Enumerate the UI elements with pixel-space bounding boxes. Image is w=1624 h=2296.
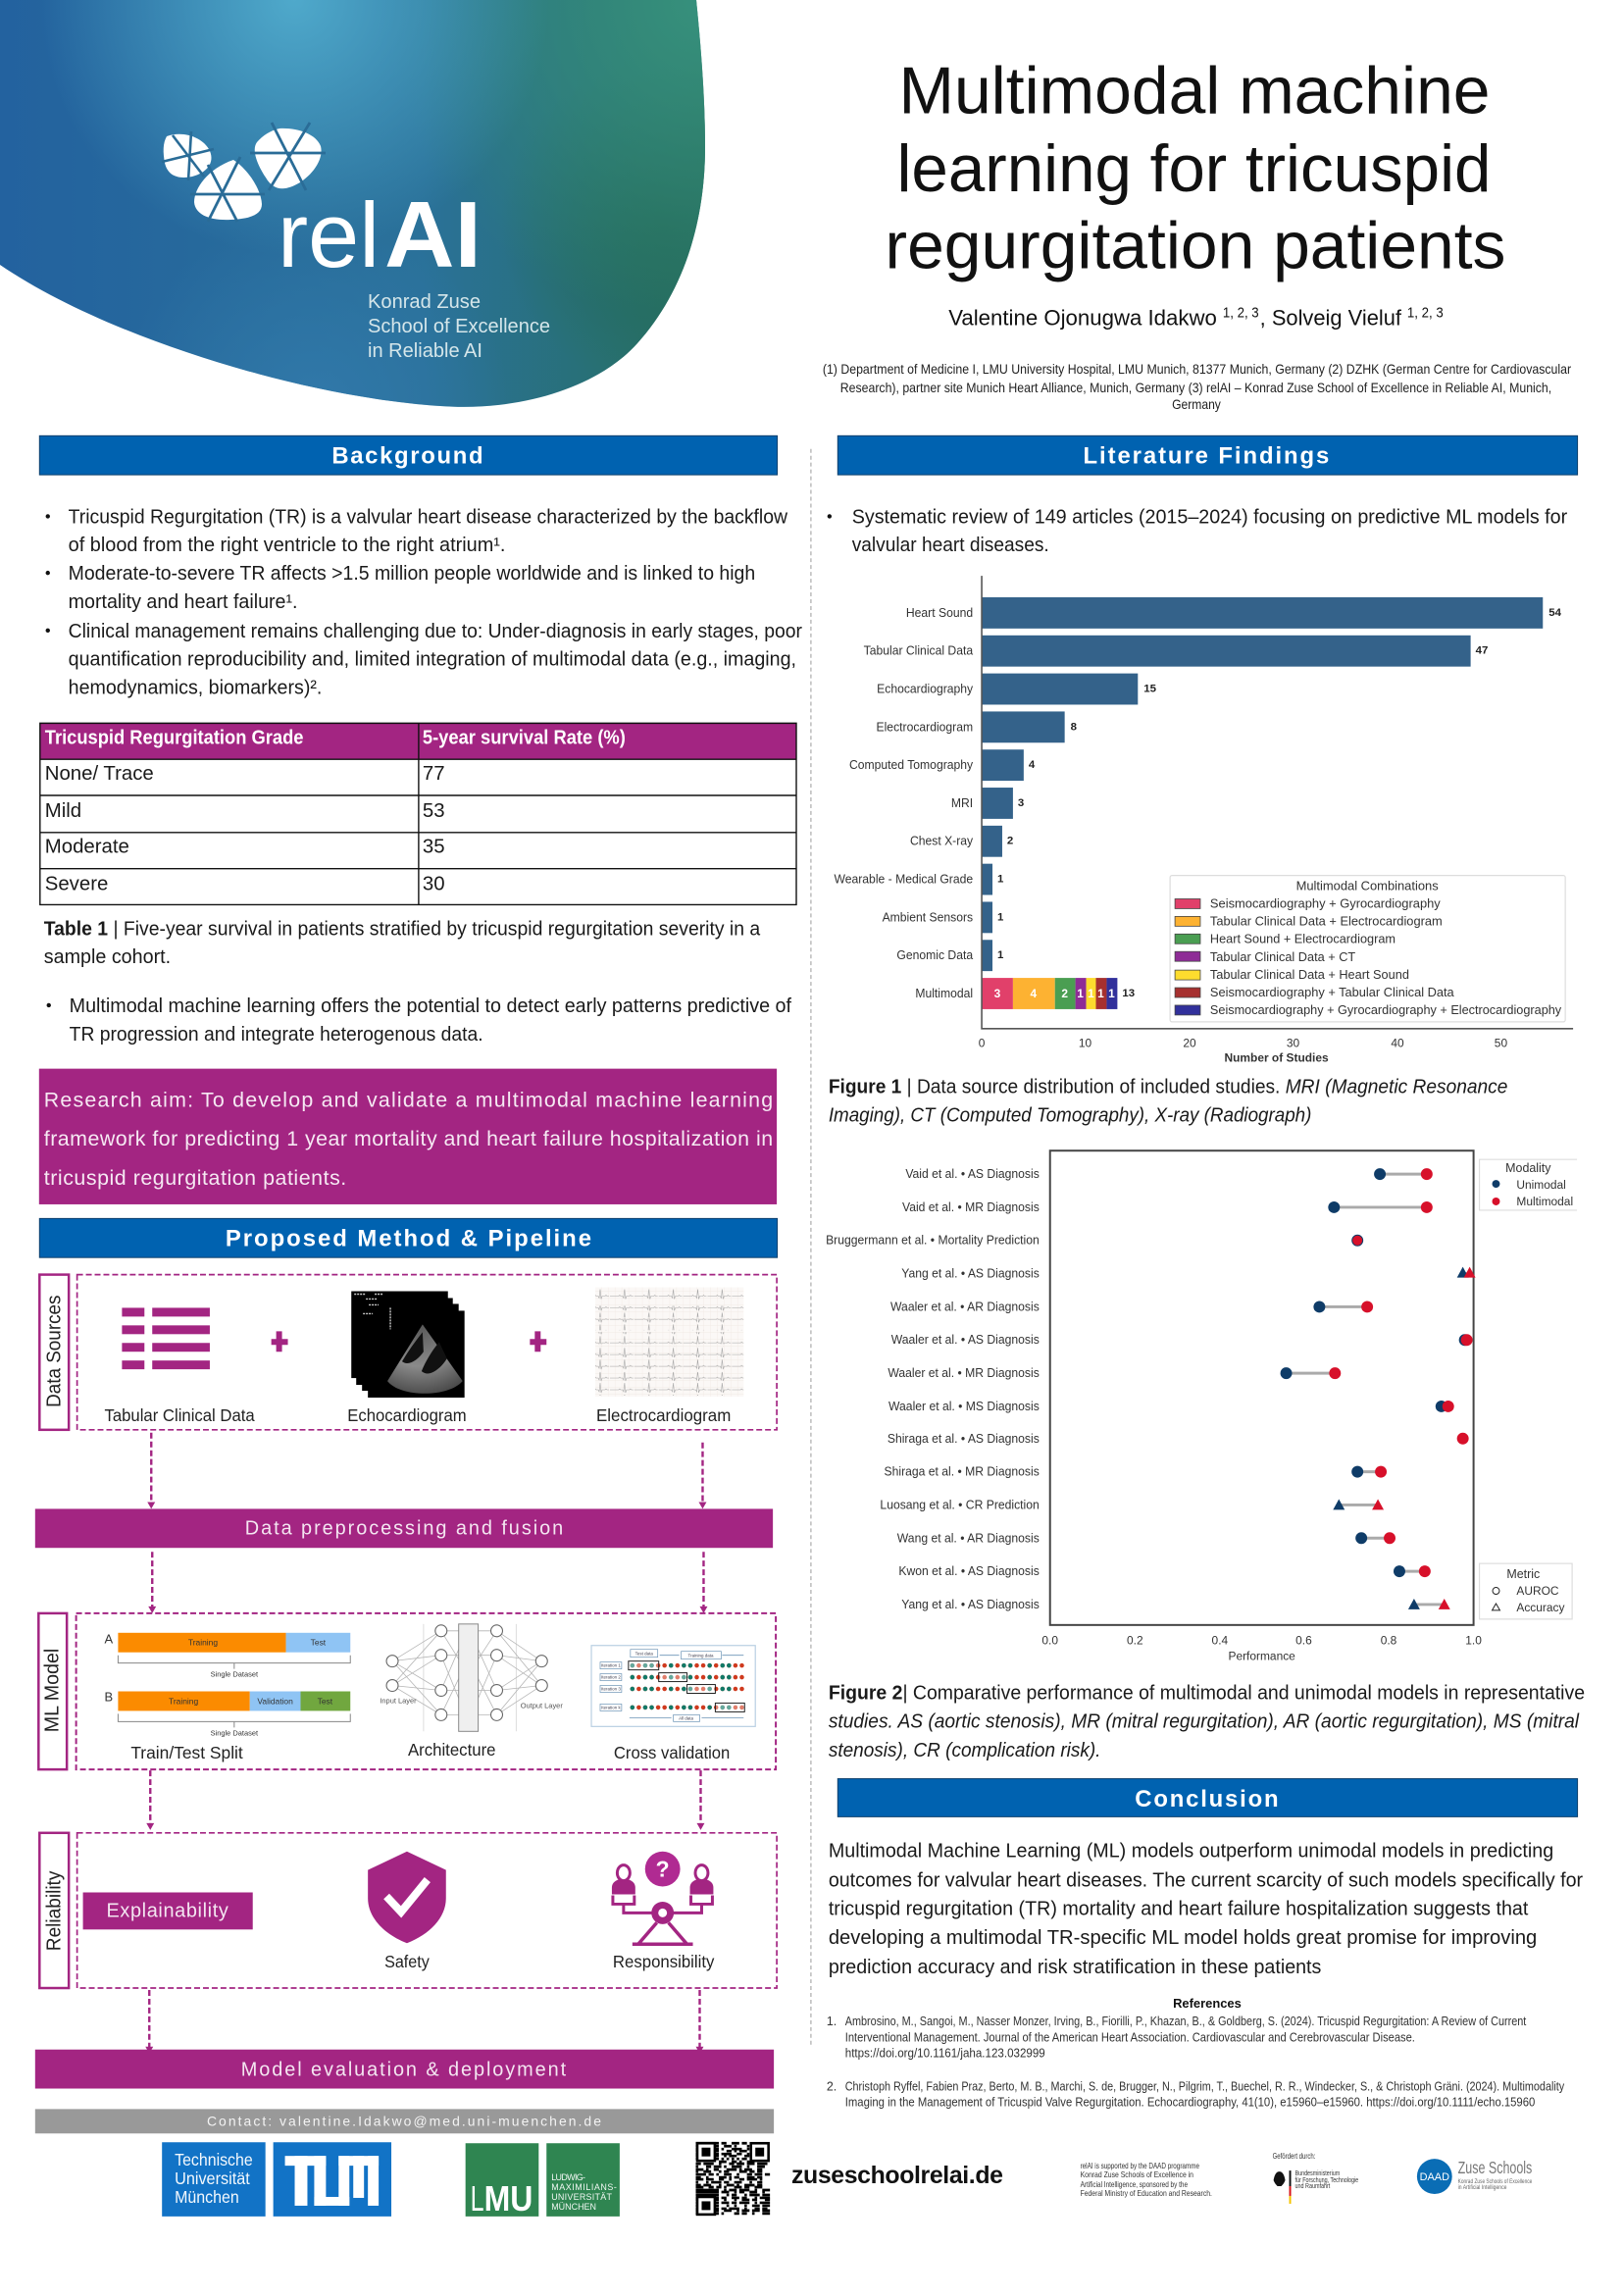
conclusion text: prediction accuracy and risk stratification in these patients [829, 1957, 1321, 1978]
conclusion text: outcomes for valvular heart diseases. The current scarcity of such models specifically for [829, 1870, 1583, 1892]
chart: train/test split: B [104, 1689, 113, 1704]
legend: metric: AUROC [1516, 1584, 1559, 1598]
category labels: Ambient Sensors [883, 910, 973, 924]
chart: train/test split: Test [311, 1638, 327, 1648]
chart: train/test split [104, 1632, 350, 1737]
figure 2 caption: studies. AS (aortic stenosis), MR (mitral regurgitation), AR (aortic regurgitation), MS (mitral [829, 1710, 1580, 1732]
figure 1 caption [829, 1077, 1507, 1126]
value labels: 1 [997, 949, 1004, 961]
diagram: cross validation: Iteration 1 [601, 1663, 621, 1668]
bullet: systematic review [828, 506, 1567, 556]
icon: tabular data [122, 1307, 210, 1369]
logo: LMU: MU [484, 2179, 533, 2219]
x axis: 30 [1287, 1037, 1300, 1050]
table: survival by grade: 77 [423, 763, 445, 785]
source labels: Echocardiogram [347, 1405, 467, 1425]
study labels: Vaid et al. • AS Diagnosis [905, 1167, 1040, 1181]
diagram: cross validation: Iteration 2 [601, 1675, 621, 1680]
image: ECG trace [595, 1288, 743, 1397]
heading: Literature Findings: Literature Findings [1084, 443, 1329, 470]
callout: research aim [39, 1069, 777, 1204]
references: https://doi.org/10.1161/jaha.123.032999 [845, 2047, 1045, 2061]
arrow: sources to preprocessing left [147, 1433, 155, 1508]
multimodal stacked bar: 2 [1061, 987, 1068, 1000]
module labels: Architecture [408, 1740, 496, 1760]
table: survival by grade: Moderate [45, 837, 129, 858]
references: References [1173, 1996, 1242, 2011]
references [827, 1996, 1565, 2109]
chart: train/test split: Training [169, 1696, 198, 1706]
category labels: Multimodal [915, 987, 973, 1000]
x axis [979, 1037, 1507, 1065]
module labels [130, 1740, 730, 1762]
logo: LMU: MAXIMILIANS- [551, 2182, 617, 2192]
diagram: network architecture: Output Layer [521, 1701, 563, 1709]
panel: data sources [39, 1275, 777, 1430]
table: survival by grade: 53 [423, 800, 445, 822]
image: echocardiogram stack [351, 1292, 465, 1398]
icon: safety shield [368, 1852, 446, 1943]
table: survival by grade: 30 [423, 874, 445, 895]
table: survival by grade: 35 [423, 837, 445, 858]
logo: TUM [162, 2142, 391, 2217]
multimodal stacked bar: 4 [1030, 987, 1037, 1000]
performance axis: 0.4 [1212, 1634, 1229, 1648]
category labels: Echocardiography [877, 682, 974, 696]
source labels: Tabular Clinical Data [104, 1405, 255, 1425]
bullet: systematic review: Systematic review of 149 articles (2015–2024) focusing on predictive ML models for [852, 506, 1567, 528]
arrow: model to reliability left [146, 1770, 154, 1830]
icon: plus [272, 1331, 288, 1352]
callout: research aim: tricuspid regurgitation patients. [44, 1166, 346, 1190]
panel: ML model [38, 1613, 776, 1769]
study labels: Shiraga et al. • AS Diagnosis [888, 1431, 1040, 1446]
logo wordmark relAI [278, 182, 482, 287]
chart: train/test split: Training [188, 1638, 218, 1648]
table: survival by grade: 5-year survival Rate (%) [423, 727, 626, 748]
chart: train/test split: Test [318, 1696, 333, 1706]
diagram: cross validation: Iteration 3 [601, 1687, 621, 1692]
logo: DAAD Zuse Schools: DAAD [1420, 2171, 1449, 2183]
diagram: cross validation: All data [679, 1715, 694, 1720]
title: Multimodal machine [898, 54, 1491, 128]
affiliations: Germany [1172, 397, 1221, 412]
authors: 1, 2, 3 [1223, 304, 1259, 321]
x axis: 20 [1183, 1037, 1196, 1050]
diagram: cross validation: Training data [688, 1654, 714, 1658]
study labels: Vaid et al. • MR Diagnosis [902, 1200, 1040, 1214]
multimodal stacked bar: 1 [1108, 987, 1115, 1000]
multimodal stacked bar: 3 [994, 987, 1001, 1000]
references: Ambrosino, M., Sangoi, M., Nasser Monzer, Irving, B., Fiorilli, P., Khazan, B., & Goldberg, S. (2024). Tricuspid Regurgitation: A Review of Current [845, 2015, 1527, 2028]
sponsor note: Federal Ministry of Education and Research. [1081, 2189, 1212, 2198]
table: survival by grade: Mild [45, 800, 81, 822]
icon: relAI wheels logo [162, 123, 326, 222]
legend: multimodal combinations: Seismocardiography + Gyrocardiography [1210, 895, 1441, 910]
figure 2 caption: Figure 2| Comparative performance of multimodal and unimodal models in representative [829, 1682, 1585, 1704]
diagram: cross validation: Test data [635, 1652, 653, 1657]
panel: background text: quantification reproducibility and, limited integration of multimodal data (e.g., imaging, [69, 649, 796, 671]
category labels: Tabular Clinical Data [864, 643, 973, 658]
authors: 1, 2, 3 [1407, 304, 1444, 321]
category labels: Electrocardiogram [876, 720, 973, 734]
bullet: multimodal potential: Multimodal machine learning offers the potential to detect early patterns predictive of [70, 995, 791, 1017]
label: Safety: Safety [384, 1952, 430, 1971]
bar: data preprocessing and fusion: Data preprocessing and fusion [245, 1517, 563, 1539]
authors: Valentine Ojonugwa Idakwo [948, 305, 1217, 330]
bar: model evaluation and deployment: Model evaluation & deployment [241, 2060, 567, 2081]
performance axis: 0.2 [1127, 1634, 1143, 1648]
study labels: Waaler et al. • AR Diagnosis [890, 1300, 1040, 1314]
logo subtitle [368, 291, 550, 362]
arrow: reliability to evaluation left [145, 1990, 153, 2054]
logo: TUM: Technische [175, 2150, 253, 2169]
legend: modality [1480, 1159, 1577, 1210]
value labels: 15 [1143, 684, 1157, 695]
bars [982, 597, 1543, 971]
table: survival by grade: None/ Trace [45, 763, 154, 785]
callout: research aim: framework for predicting 1 year mortality and heart failure hospitalization in [44, 1127, 773, 1150]
legend: modality: Multimodal [1516, 1195, 1573, 1208]
panel: reliability [39, 1833, 777, 1988]
module labels: Cross validation [614, 1743, 730, 1762]
panel: background text: Tricuspid Regurgitation (TR) is a valvular heart disease characterized by the backflow [69, 506, 787, 528]
chart: train/test split: A [104, 1632, 113, 1647]
panel: background text: hemodynamics, biomarkers)². [69, 678, 322, 699]
multimodal markers [1329, 1168, 1476, 1609]
bar: contact: Contact: valentine.Idakwo@med.uni-muenchen.de [207, 2113, 601, 2128]
multimodal stacked bar [982, 978, 1117, 1009]
logo wordmark relAI: AI [384, 182, 482, 287]
heading: Literature Findings [837, 435, 1578, 475]
legend: multimodal combinations: Tabular Clinical Data + CT [1210, 949, 1355, 964]
diagram: network architecture [380, 1624, 563, 1731]
category labels: Computed Tomography [849, 758, 974, 772]
authors [948, 304, 1444, 330]
logo subtitle: Konrad Zuse [368, 291, 481, 313]
logo: TUM: Universität [175, 2168, 250, 2188]
source labels [104, 1405, 731, 1425]
table: survival by grade [40, 723, 796, 904]
legend: multimodal combinations: Heart Sound + Electrocardiogram [1210, 931, 1396, 945]
sponsor note: relAI is supported by the DAAD programme [1081, 2162, 1199, 2170]
value labels: 47 [1476, 645, 1488, 657]
chart: data source distribution [834, 576, 1573, 1065]
icon: plus [530, 1331, 546, 1352]
multimodal stacked bar: 1 [1097, 987, 1104, 1000]
panel: background text: of blood from the right ventricle to the right atrium¹. [69, 535, 505, 556]
table caption: Table 1 | Five-year survival in patients stratified by tricuspid regurgitation severity in a [44, 918, 761, 940]
legend: multimodal combinations: Tabular Clinical Data + Electrocardiogram [1210, 913, 1443, 928]
study labels: Waaler et al. • MR Diagnosis [888, 1366, 1040, 1380]
title: regurgitation patients [886, 210, 1505, 283]
logo: LMU: MÜNCHEN [551, 2202, 596, 2212]
affiliations: (1) Department of Medicine I, LMU University Hospital, LMU Munich, 81377 Munich, Germany (2) DZHK (German Centre for Cardiovascular [823, 362, 1572, 377]
x axis: 40 [1391, 1037, 1404, 1050]
diagram: cross validation [591, 1646, 755, 1726]
figure 2 caption: stenosis), CR (complication risk). [829, 1740, 1100, 1761]
study labels: Yang et al. • AS Diagnosis [901, 1266, 1040, 1281]
legend: multimodal combinations: Multimodal Combinations [1296, 879, 1439, 893]
arrow: preprocessing to model left [148, 1552, 156, 1613]
study labels [826, 1167, 1040, 1611]
category labels: Chest X-ray [910, 834, 974, 848]
logo: DAAD Zuse Schools: in Artificial Intelligence [1458, 2184, 1507, 2191]
sponsor note [1081, 2162, 1212, 2198]
study labels: Luosang et al. • CR Prediction [880, 1498, 1040, 1512]
arrow: model to reliability right [697, 1770, 704, 1830]
bullet: systematic review: valvular heart diseases. [852, 535, 1049, 556]
category labels [834, 606, 974, 1000]
figure 2 caption [829, 1682, 1585, 1761]
icon: responsibility scales: ? [656, 1857, 670, 1882]
arrow: sources to preprocessing right [698, 1443, 706, 1508]
panel: background text [46, 506, 802, 699]
diagram: network architecture: Input Layer [380, 1696, 417, 1705]
logo: LMU: LUDWIG- [551, 2172, 585, 2182]
category labels: Genomic Data [896, 948, 973, 962]
logo wordmark relAI: rel [278, 183, 380, 286]
references: 1. [827, 2015, 837, 2028]
logo: DAAD Zuse Schools: Zuse Schools [1458, 2158, 1532, 2177]
label: ML Model [38, 1613, 67, 1769]
logo: LMU: L [471, 2179, 484, 2219]
module labels: Train/Test Split [130, 1743, 243, 1762]
study labels: Yang et al. • AS Diagnosis [901, 1598, 1040, 1611]
performance axis: 0.0 [1041, 1634, 1058, 1648]
panel: background text: Moderate-to-severe TR affects >1.5 million people worldwide and is linked to high [69, 563, 755, 585]
table: survival by grade: Tricuspid Regurgitation Grade [45, 727, 303, 748]
bullet: multimodal potential: TR progression and integrate heterogenous data. [70, 1024, 483, 1046]
x axis: 10 [1079, 1037, 1092, 1050]
chart: train/test split: Validation [257, 1696, 293, 1706]
label: Data Sources [39, 1275, 69, 1430]
label: Reliability: Reliability [44, 1871, 66, 1951]
label: Reliability [39, 1833, 69, 1988]
sponsor note: Konrad Zuse Schools of Excellence in [1081, 2170, 1193, 2179]
logo subtitle: in Reliable AI [368, 340, 482, 362]
legend: multimodal combinations: Seismocardiography + Tabular Clinical Data [1210, 985, 1454, 999]
performance axis [1041, 1634, 1482, 1663]
heading: Proposed Method & Pipeline [39, 1218, 778, 1257]
value labels: 13 [1122, 988, 1135, 999]
connectors [1287, 1174, 1470, 1605]
conclusion text: Multimodal Machine Learning (ML) models outperform unimodal models in predicting [829, 1841, 1553, 1862]
study labels: Shiraga et al. • MR Diagnosis [885, 1464, 1040, 1479]
heading: Background: Background [331, 443, 483, 470]
logo: DAAD Zuse Schools: Konrad Zuse Schools of Excellence [1458, 2178, 1533, 2185]
bullet: multimodal potential [47, 995, 791, 1046]
logo: LMU: UNIVERSITÄT [551, 2192, 612, 2202]
panel: background text: mortality and heart failure¹. [69, 591, 298, 613]
study labels: Waaler et al. • AS Diagnosis [891, 1333, 1040, 1347]
icon: QR code [696, 2143, 770, 2215]
multimodal stacked bar: 1 [1077, 987, 1084, 1000]
value labels: 1 [997, 874, 1004, 886]
conclusion text: developing a multimodal TR-specific ML model holds great promise for improving [829, 1927, 1537, 1949]
performance axis: 0.6 [1295, 1634, 1312, 1648]
affiliations: Research), partner site Munich Heart Alliance, Munich, Germany (3) relAI – Konrad Zuse School of Excellence in Reliable AI, Munich, [840, 381, 1551, 395]
decorative header blob with logo [0, 0, 705, 407]
category labels: Wearable - Medical Grade [834, 872, 973, 887]
value labels: 4 [1029, 759, 1036, 771]
logo: DAAD Zuse Schools [1417, 2158, 1533, 2194]
heading: Proposed Method & Pipeline: Proposed Method & Pipeline [226, 1226, 591, 1252]
legend: multimodal combinations: Tabular Clinical Data + Heart Sound [1210, 967, 1409, 982]
category labels: MRI [951, 796, 973, 810]
bar: data preprocessing and fusion [35, 1508, 773, 1548]
website: zuseschoolrelai.de [791, 2162, 1003, 2189]
x axis: 0 [979, 1037, 986, 1050]
figure 1 caption: Imaging), CT (Computed Tomography), X-ray (Radiograph) [829, 1104, 1311, 1126]
logo: TUM: München [175, 2187, 239, 2207]
legend: multimodal combinations [1170, 876, 1565, 1022]
chart: performance dumbbell [826, 1150, 1577, 1663]
performance axis: 1.0 [1465, 1634, 1482, 1648]
value labels: 3 [1018, 797, 1024, 809]
legend: multimodal combinations: Seismocardiography + Gyrocardiography + Electrocardiography [1210, 1002, 1562, 1017]
logo: BMFTR: Bundesministerium [1294, 2168, 1340, 2177]
heading: Conclusion [837, 1779, 1578, 1816]
value labels: 2 [1007, 836, 1013, 847]
callout: research aim: Research aim: To develop and validate a multimodal machine learning [44, 1088, 773, 1111]
bar: contact [35, 2109, 774, 2133]
legend: modality: Modality [1505, 1161, 1551, 1175]
label: Data Sources: Data Sources [44, 1295, 66, 1407]
legend: metric: Accuracy [1516, 1601, 1565, 1614]
value labels [997, 607, 1562, 999]
performance axis: 0.8 [1381, 1634, 1397, 1648]
bar: model evaluation and deployment [35, 2050, 774, 2089]
legend: modality: Unimodal [1516, 1178, 1566, 1192]
value labels: 1 [997, 911, 1004, 923]
title [886, 54, 1505, 283]
sponsor note: Artificial Intelligence, sponsored by the [1081, 2180, 1188, 2189]
performance axis: Performance [1228, 1650, 1295, 1663]
chart: train/test split: Single Dataset [211, 1728, 259, 1737]
table: survival by grade: Severe [45, 874, 108, 895]
heading: Conclusion: Conclusion [1135, 1786, 1279, 1812]
category labels: Heart Sound [906, 606, 973, 620]
label: Responsibility: Responsibility [613, 1952, 715, 1971]
label: ML Model: ML Model [42, 1649, 64, 1732]
multimodal stacked bar: 1 [1088, 987, 1094, 1000]
authors: , Solveig Vieluf [1260, 305, 1402, 330]
table caption [44, 918, 761, 968]
diagram: cross validation: Iteration k [601, 1705, 622, 1709]
source labels: Electrocardiogram [596, 1405, 731, 1425]
affiliations [823, 362, 1572, 412]
legend: metric: Metric [1506, 1567, 1540, 1581]
study labels: Waaler et al. • MS Diagnosis [888, 1400, 1040, 1413]
logo: BMFTR: und Raumfahrt [1294, 2181, 1331, 2190]
box: Explainability [83, 1892, 253, 1929]
references: Interventional Management. Journal of the American Heart Association. Cardiovascular and Cerebrovascular Disease. [845, 2031, 1415, 2045]
conclusion text [829, 1841, 1583, 1978]
study labels: Bruggermann et al. • Mortality Prediction [826, 1233, 1040, 1248]
arrow: preprocessing to model right [699, 1552, 707, 1613]
references: 2. [827, 2080, 837, 2094]
x axis: Number of Studies [1225, 1051, 1329, 1065]
table caption: sample cohort. [44, 946, 171, 968]
logo: BMFTR: für Forschung, Technologie [1294, 2175, 1358, 2184]
legend: metric [1480, 1563, 1572, 1619]
chart: train/test split: Single Dataset [211, 1670, 259, 1679]
value labels: 54 [1548, 607, 1562, 619]
references: Imaging in the Management of Tricuspid Valve Regurgitation. Echocardiography, 41(10), e15960–e15960. https://doi.org/10.1111/echo.15960 [845, 2095, 1535, 2109]
study labels: Kwon et al. • AS Diagnosis [898, 1564, 1040, 1578]
icon: responsibility scales [612, 1852, 713, 1944]
title: learning for tricuspid [896, 132, 1492, 206]
logo subtitle: School of Excellence [368, 316, 550, 337]
value labels: 8 [1071, 721, 1078, 733]
logo: BMFTR: Gefördert durch: [1273, 2152, 1315, 2161]
unimodal markers [1281, 1168, 1471, 1609]
heading: Background [39, 435, 778, 475]
x axis: 50 [1495, 1037, 1507, 1050]
conclusion text: tricuspid regurgitation (TR) mortality and heart failure hospitalization suggests that [829, 1898, 1529, 1919]
arrow: reliability to evaluation right [696, 1990, 703, 2054]
logo: LMU [466, 2143, 620, 2219]
study labels: Wang et al. • AR Diagnosis [897, 1531, 1040, 1545]
panel: background text: Clinical management remains challenging due to: Under-diagnosis in early stages, poor [69, 621, 802, 642]
logo: BMFTR [1273, 2152, 1358, 2204]
figure 1 caption: Figure 1 | Data source distribution of included studies. MRI (Magnetic Resonance [829, 1077, 1507, 1098]
box: Explainability: Explainability [106, 1900, 228, 1921]
